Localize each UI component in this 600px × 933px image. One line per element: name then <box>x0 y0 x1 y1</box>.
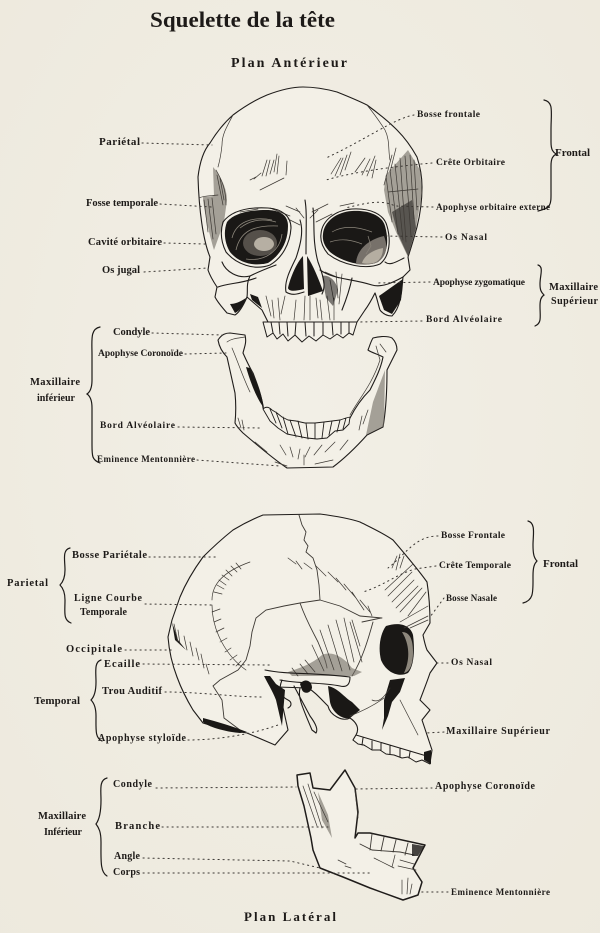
label: Corps: Corps <box>113 867 140 878</box>
label: Apophyse styloïde: Apophyse styloïde <box>98 733 187 744</box>
lower teeth <box>263 407 350 439</box>
label: Maxillaire inférieur: inférieur <box>37 393 76 404</box>
brace: maxillaire inférieur group <box>87 327 100 463</box>
labels: lateral view <box>7 521 578 897</box>
brace: maxillaire supérieur group <box>535 265 544 326</box>
label: Os jugal <box>102 265 208 276</box>
temporal line hatching <box>212 558 372 670</box>
label: Crête Orbitaire <box>326 158 505 180</box>
label: Crête Temporale <box>363 561 511 592</box>
label: Ecaille: Ecaille <box>104 659 140 670</box>
label: Bosse Pariétale: Bosse Pariétale <box>72 550 147 561</box>
label: Maxillaire inférieur <box>30 377 80 404</box>
label: Eminence Mentonnière: Eminence Mentonnière <box>97 454 195 464</box>
label: Bord Alvéolaire: Bord Alvéolaire <box>426 315 502 325</box>
labels: anterior view <box>30 100 599 466</box>
sutures <box>218 105 390 167</box>
label: Temporal: Temporal <box>34 695 80 707</box>
label: Crête Orbitaire: Crête Orbitaire <box>436 158 505 168</box>
label: Branche: Branche <box>115 821 160 832</box>
mandible outline <box>218 333 397 468</box>
label: Apophyse Coronoïde: Apophyse Coronoïde <box>98 349 183 359</box>
upper teeth <box>263 322 357 342</box>
label: Occipitale: Occipitale <box>66 644 122 655</box>
label: Pariétal <box>99 136 212 148</box>
upper teeth <box>353 735 430 764</box>
label: Eminence Mentonnière <box>97 454 280 466</box>
maxilla shading <box>382 678 405 730</box>
anterior mandible drawing <box>218 333 397 468</box>
temporal shading, right <box>384 150 422 257</box>
label: Condyle <box>113 327 222 338</box>
label: Frontal: Frontal <box>555 147 590 159</box>
label: Os Nasal: Os Nasal <box>445 233 487 243</box>
label: Apophyse styloïde <box>98 725 278 744</box>
label: Eminence Mentonnière: Eminence Mentonnière <box>451 887 550 897</box>
temporal shading, left <box>203 167 227 250</box>
label: Os Nasal <box>385 233 487 243</box>
label: Fosse temporale <box>86 198 212 209</box>
teeth <box>360 834 414 855</box>
label: Maxillaire Supérieur: Maxillaire Supérieur <box>446 726 551 737</box>
label: Apophyse orbitaire externe <box>345 202 550 212</box>
sutures <box>213 515 382 730</box>
label: Ligne Courbe Temporale: Ligne Courbe <box>74 593 143 604</box>
label: Apophyse zygomatique: Apophyse zygomatique <box>433 278 525 288</box>
label: Condyle: Condyle <box>113 779 153 790</box>
label: Apophyse Coronoïde <box>98 349 226 359</box>
label: Bosse Frontale: Bosse Frontale <box>441 531 505 541</box>
label: Cavité orbitaire: Cavité orbitaire <box>88 237 162 248</box>
nasal bones and aperture <box>288 256 304 291</box>
temporal fossa shading <box>288 653 362 676</box>
anterior skull drawing <box>198 87 422 342</box>
cranium and face outline <box>168 514 437 763</box>
orbit <box>380 624 414 675</box>
cranium outline <box>198 87 422 322</box>
label: Crête Temporale: Crête Temporale <box>439 561 511 571</box>
brace: parietal group <box>60 548 71 623</box>
label: Parietal: Parietal <box>7 578 48 589</box>
cheekbone shadows <box>379 279 403 314</box>
heading: plan antérieur: Plan Antérieur <box>231 56 347 71</box>
brace: temporal group <box>91 660 102 741</box>
right orbit <box>323 211 387 264</box>
label: Bosse Nasale: Bosse Nasale <box>446 593 497 603</box>
label: Bord Alvéolaire: Bord Alvéolaire <box>100 421 175 431</box>
label: Bosse Frontale <box>388 531 505 568</box>
label: Apophyse Coronoïde: Apophyse Coronoïde <box>435 781 536 792</box>
occipital shading <box>172 622 186 650</box>
label: Frontal: Frontal <box>543 558 578 570</box>
forehead hatching <box>385 554 428 628</box>
label: Bosse frontale <box>326 110 480 158</box>
label: Occipitale <box>66 644 172 655</box>
label: Maxillaire Supérieur: Maxillaire <box>549 282 598 293</box>
label: Maxillaire Supérieur: Supérieur <box>551 296 599 307</box>
label: Maxillaire Inférieur <box>38 811 86 838</box>
label: Bosse frontale: Bosse frontale <box>417 110 480 120</box>
label: Angle <box>114 851 320 868</box>
heading: plan latéral: Plan Latéral <box>244 909 336 924</box>
ear and jaw joint shadow <box>264 676 285 726</box>
lateral skull drawing <box>168 514 437 764</box>
label: Ligne Courbe Temporale: Temporale <box>80 607 128 618</box>
label: Bosse Nasale <box>430 593 497 617</box>
label: Cavité orbitaire <box>88 237 205 248</box>
shading <box>318 792 332 838</box>
label: Condyle: Condyle <box>113 327 150 338</box>
left orbit <box>225 210 288 264</box>
label: Pariétal: Pariétal <box>99 136 140 148</box>
brace: frontal group <box>538 100 556 211</box>
brace: maxillaire inférieur group, lateral <box>96 778 107 876</box>
brace: frontal group, lateral <box>523 521 537 603</box>
title: Squelette de la tête <box>150 7 335 32</box>
label: Trou Auditif: Trou Auditif <box>102 686 162 697</box>
label: Maxillaire Inférieur: Maxillaire <box>38 811 86 822</box>
label: Os Nasal: Os Nasal <box>451 658 492 668</box>
label: Maxillaire inférieur: Maxillaire <box>30 377 80 388</box>
label: Apophyse orbitaire externe: Apophyse orbitaire externe <box>436 202 550 212</box>
label: Ligne Courbe Temporale <box>74 593 212 618</box>
label: Angle: Angle <box>114 851 141 862</box>
label: Trou Auditif <box>102 686 262 697</box>
label: Maxillaire Inférieur: Inférieur <box>44 827 83 838</box>
zygomatic arch <box>265 670 350 733</box>
label: Fosse temporale: Fosse temporale <box>86 198 158 209</box>
label: Maxillaire Supérieur <box>549 282 599 307</box>
mandible shadows <box>246 367 264 408</box>
mandible outline <box>297 770 425 900</box>
brow hatching <box>240 152 376 218</box>
label: Os jugal: Os jugal <box>102 265 140 276</box>
lateral mandible drawing <box>297 770 425 900</box>
zygomatic bones <box>218 258 404 310</box>
